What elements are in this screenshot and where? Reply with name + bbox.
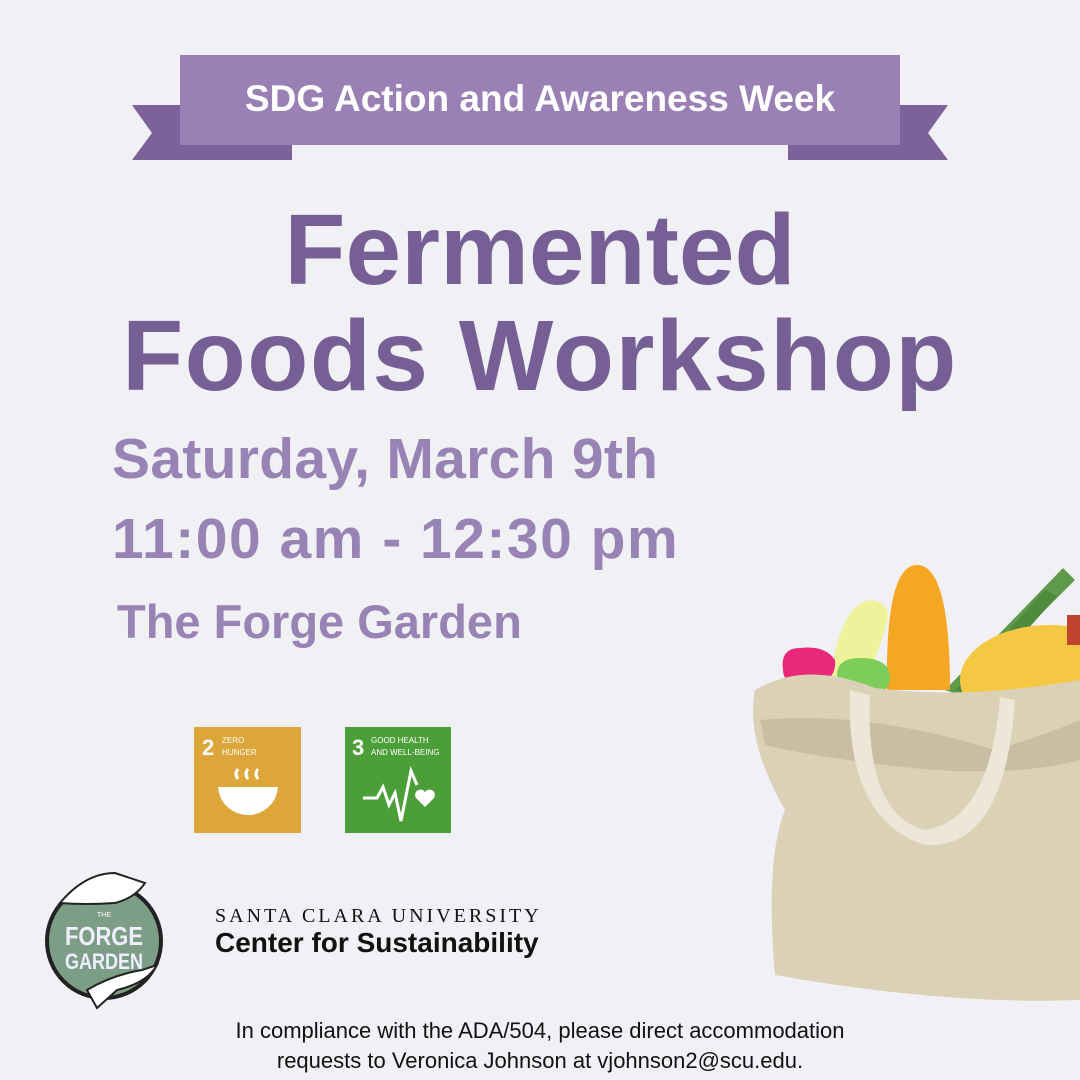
footer note: requests to Veronica Johnson at vjohnson2@scu.edu. xyxy=(277,1048,803,1073)
banner: SDG Action and Awareness Week xyxy=(245,78,835,119)
icon: SDG 2: HUNGER xyxy=(222,748,257,757)
icon: SDG 3 xyxy=(345,727,451,833)
banner xyxy=(132,55,948,160)
footer note: In compliance with the ADA/504, please direct accommodation xyxy=(236,1018,844,1043)
icon: SDG 2: 2 xyxy=(202,735,214,760)
logo: forge garden: GARDEN xyxy=(65,949,143,974)
icon: SDG 3: AND WELL-BEING xyxy=(371,748,439,757)
logo: forge garden xyxy=(45,872,163,1010)
icon: SDG 3: 3 xyxy=(352,735,364,760)
illustration: grocery bag xyxy=(753,565,1080,1001)
date: Saturday, March 9th xyxy=(112,427,658,491)
footer note xyxy=(236,1018,844,1073)
icon: SDG 2 xyxy=(194,727,301,833)
title: Foods Workshop xyxy=(122,300,958,412)
logo: forge garden: THE xyxy=(97,912,111,919)
time: 11:00 am - 12:30 pm xyxy=(112,507,679,571)
logo: SCU center for sustainability: SANTA CLARA UNIVERSITY xyxy=(215,905,542,927)
logo: forge garden: FORGE xyxy=(65,921,143,951)
icon: SDG 2: ZERO xyxy=(222,736,244,745)
location: The Forge Garden xyxy=(117,595,522,648)
logo: SCU center for sustainability: Center for Sustainability xyxy=(215,927,539,958)
title: Fermented xyxy=(284,194,796,306)
title xyxy=(122,194,958,412)
icon: SDG 3: GOOD HEALTH xyxy=(371,736,429,745)
logo: SCU center for sustainability xyxy=(215,905,542,958)
